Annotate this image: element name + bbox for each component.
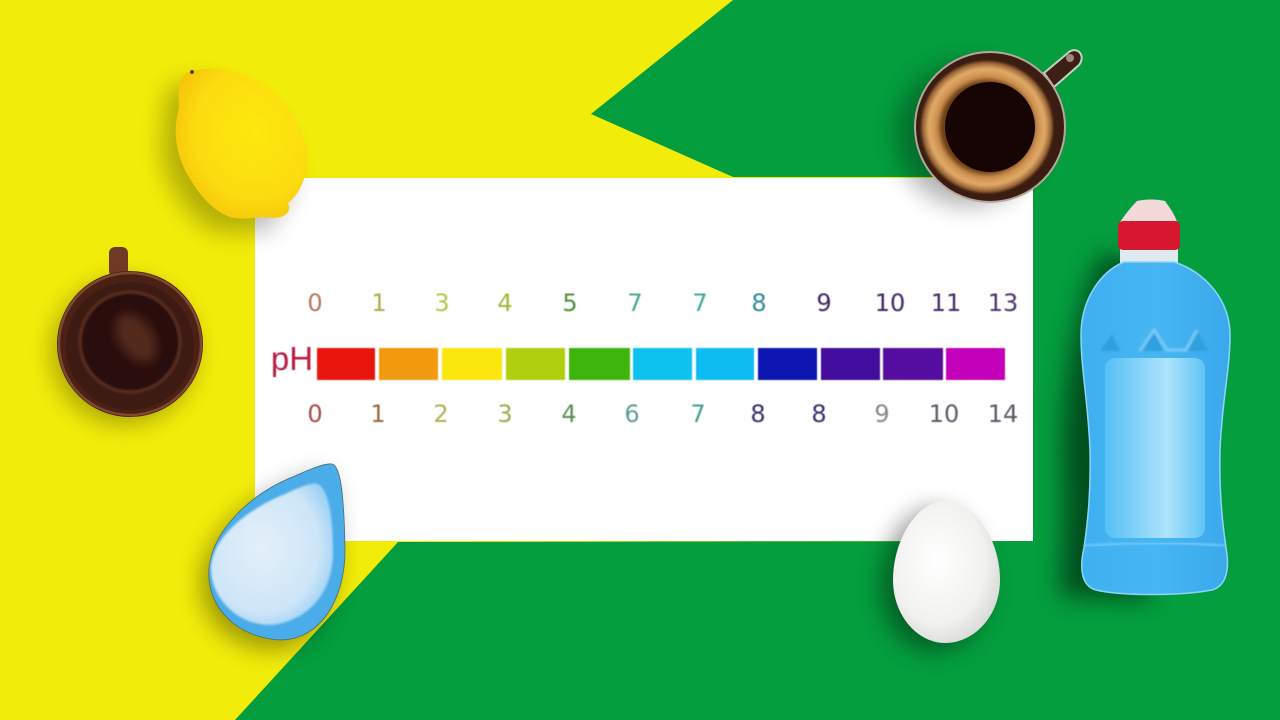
bottom number row: 10 xyxy=(929,400,959,428)
top number row: 0 xyxy=(307,289,323,317)
pH label: pH xyxy=(271,340,313,377)
top number row: 11 xyxy=(931,289,961,317)
top number row: 9 xyxy=(816,289,832,317)
icon: blue bottle xyxy=(1060,200,1230,600)
top number row: 13 xyxy=(988,289,1018,317)
bottle label xyxy=(1105,358,1205,538)
bottom number row: 4 xyxy=(561,400,577,428)
top number row: 7 xyxy=(692,289,708,317)
icon: dark cup with water xyxy=(52,247,203,424)
bottom number row: 0 xyxy=(307,400,323,428)
red cap xyxy=(1118,221,1180,250)
bottom number row: 14 xyxy=(988,400,1018,428)
bottom number row: 9 xyxy=(874,400,890,428)
top number row: 7 xyxy=(627,289,643,317)
top number row xyxy=(307,289,1018,317)
bottom number row: 8 xyxy=(811,400,827,428)
top number row: 5 xyxy=(562,289,578,317)
bottom number row: 8 xyxy=(750,400,766,428)
bottle body xyxy=(1081,262,1230,594)
icon: lemon xyxy=(162,69,307,233)
pH scale xyxy=(271,289,1018,428)
top number row: 1 xyxy=(371,289,387,317)
shoulder ridges xyxy=(1100,330,1208,351)
top number row: 3 xyxy=(434,289,450,317)
icon: water drop xyxy=(201,464,345,650)
bottom number row: 7 xyxy=(690,400,706,428)
base ring xyxy=(1084,543,1226,546)
white card xyxy=(255,178,1033,541)
top number row: 4 xyxy=(497,289,513,317)
bottom number row: 2 xyxy=(433,400,449,428)
bottom number row: 6 xyxy=(624,400,640,428)
top number row: 10 xyxy=(875,289,905,317)
colour bar xyxy=(317,348,1005,380)
bottom number row: 1 xyxy=(370,400,386,428)
icon: coffee cup xyxy=(896,50,1082,206)
icon: egg xyxy=(881,501,1000,651)
bottle neck and nozzle xyxy=(1120,200,1177,222)
bottom number row: 3 xyxy=(497,400,513,428)
bottom number row xyxy=(307,400,1018,428)
top number row: 8 xyxy=(751,289,767,317)
